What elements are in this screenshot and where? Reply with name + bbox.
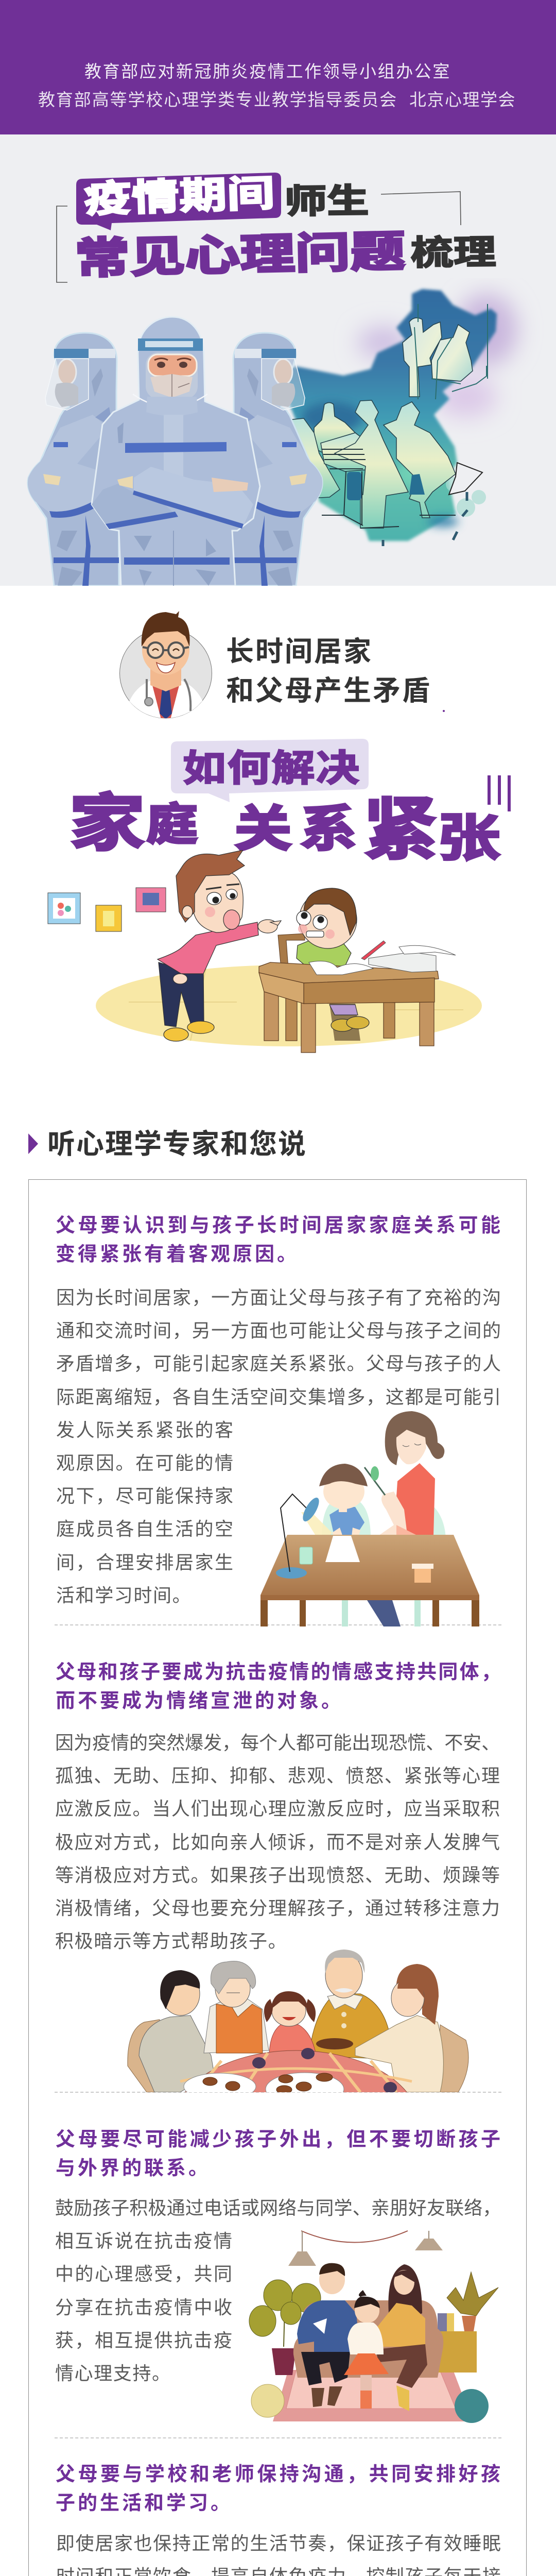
small dot: [443, 710, 445, 712]
advice 1 text: 况下，尽可能保持家: [56, 1485, 233, 1506]
bubble text: 如何解决: [183, 748, 359, 789]
man: [297, 2263, 360, 2407]
title words sorting: 梳理: [410, 233, 496, 272]
word family: 家: [69, 788, 145, 858]
advice 1 text: 通和交流时间，另一方面也可能让父母与孩子之间的: [56, 1320, 501, 1341]
advice 4 text: 即使居家也保持正常的生活节奏，保证孩子有效睡眠: [56, 2533, 501, 2554]
dark gaps: [347, 472, 425, 500]
advice 1 text: 庭成员各自生活的空: [56, 1518, 233, 1539]
left man: [139, 1970, 214, 2092]
topic heading line 2: 和父母产生矛盾: [226, 675, 431, 706]
child: [319, 1464, 368, 1548]
mother: [158, 850, 281, 1041]
advice 1 heading: [56, 1215, 500, 1265]
woman: [376, 2264, 427, 2411]
issuer line 1: 教育部应对新冠肺炎疫情工作领导小组办公室: [84, 62, 451, 81]
spatter islands: [446, 477, 486, 517]
advice 2 text: [55, 1732, 500, 1952]
advice 3 text: 分享在抗击疫情中收: [55, 2297, 232, 2318]
word family: [69, 788, 500, 868]
advice 2 heading: 父母和孩子要成为抗击疫情的情感支持共同体，: [56, 1662, 500, 1683]
left plant: [249, 2280, 321, 2347]
grandfather: [309, 1950, 392, 2059]
picture frames: [48, 888, 166, 931]
advice 1 text: 因为长时间居家，一方面让父母与孩子有了充裕的沟: [56, 1287, 501, 1308]
chair: [278, 934, 305, 969]
child: [297, 888, 369, 1031]
table: [185, 2050, 407, 2092]
cabinet and books: [435, 2331, 477, 2372]
illustration: mother scolding child: [47, 850, 482, 1053]
title bracket left: [57, 206, 67, 282]
panel: expert advice: [28, 1179, 527, 2576]
advice 3 text: 中的心理感受，共同: [55, 2263, 232, 2284]
sketched medics in the north: [403, 318, 473, 397]
advice 2 text: 消极情绪，父母也要充分理解孩子，通过转移注意力: [55, 1897, 500, 1919]
advice 3 text: 相互诉说在抗击疫情: [55, 2230, 232, 2251]
advice 2 text: 极应对方式，比如向亲人倾诉，而不是对亲人发脾气: [55, 1832, 500, 1853]
topic title: [69, 739, 511, 863]
rug: [273, 2370, 473, 2421]
divider 2: [55, 2092, 501, 2093]
issuer line 2: 教育部高等学校心理学类专业教学指导委员会: [38, 90, 397, 109]
lavender bubble: [171, 739, 369, 802]
paper: [325, 1536, 360, 1562]
floor: [96, 965, 482, 1046]
grandmother: [204, 1961, 269, 2053]
scattered strokes: [383, 492, 467, 546]
mother: [316, 1964, 443, 2092]
book and stack: [309, 941, 456, 975]
header band: [0, 0, 556, 134]
mother: [360, 1411, 444, 1555]
white south corner: [449, 463, 482, 495]
advice 3 heading: [56, 2129, 500, 2179]
lamp light: [301, 1512, 332, 1546]
cup: [300, 1547, 312, 1564]
advice 2 text: 孤独、无助、压抑、抑郁、悲观、愤怒、紧张等心理: [55, 1765, 500, 1786]
section heading: [28, 1129, 307, 1160]
title words in bubble: 疫情期间: [83, 173, 275, 221]
advice 2 heading: [56, 1662, 500, 1712]
watercolor map: [288, 289, 517, 546]
advice 1 text: 矛盾增多，可能引起家庭关系紧张。父母与孩子的人: [56, 1353, 501, 1374]
advice 3 text: 鼓励孩子积极通过电话或网络与同学、亲朋好友联络，: [55, 2197, 501, 2218]
title bubble: [76, 173, 281, 230]
mooncakes: [203, 2073, 333, 2094]
doctor avatar: [119, 611, 212, 718]
sketched medics around stretcher: [288, 400, 456, 528]
medic right: [231, 333, 322, 586]
girl: [264, 1991, 316, 2053]
word courtyard: 庭: [146, 800, 198, 849]
hero illustration: [27, 284, 527, 586]
hero panel: [0, 134, 556, 586]
triangle marker: [28, 1133, 38, 1154]
topic heading line 1: 长时间居家: [226, 636, 373, 667]
advice 2 text: 积极暗示等方式帮助孩子。: [55, 1930, 287, 1952]
advice 4 text: [56, 2533, 501, 2576]
advice 1 text: [56, 1287, 501, 1606]
table: [260, 1535, 479, 1595]
stretcher rails: [322, 449, 456, 528]
divider 3: [55, 2437, 501, 2438]
advice 2 text: 等消极应对方式。如果孩子出现愤怒、无助、烦躁等: [55, 1865, 500, 1886]
medic left: [28, 333, 119, 586]
chairs: [322, 1497, 371, 1538]
title words common psychological problems: 常见心理问题: [74, 228, 406, 283]
advice 1 text: 发人际关系紧张的客: [56, 1419, 233, 1440]
jeans: [367, 1600, 401, 1626]
advice 1 text: 间，合理安排居家生: [56, 1552, 233, 1573]
chairs: [127, 2019, 160, 2092]
advice 4 heading: [56, 2464, 500, 2514]
divider 1: [55, 1624, 501, 1625]
advice 3 text: 获，相互提供抗击疫: [55, 2330, 232, 2351]
illustration: family at table: [127, 1950, 468, 2092]
title bracket right: [381, 192, 461, 225]
plates: [183, 2073, 256, 2092]
hanging lamps: [288, 2231, 443, 2266]
advice 3 heading: 父母要尽可能减少孩子外出，但不要切断孩子: [56, 2129, 500, 2150]
lamp: [276, 1567, 307, 1579]
advice 1 text: 观原因。在可能的情: [56, 1452, 233, 1473]
advice 4 heading: 父母要与学校和老师保持沟通，共同安排好孩: [56, 2464, 500, 2485]
medic center: [92, 317, 260, 586]
tea cups: [252, 2048, 397, 2093]
advice 3 heading: 与外界的联系。: [56, 2158, 211, 2179]
advice 1 text: 活和学习时间。: [56, 1585, 192, 1606]
advice 2 heading: 而不要成为情绪宣泄的对象。: [56, 1690, 343, 1712]
tension lines: [489, 775, 509, 811]
word guan: 关: [234, 802, 292, 857]
word xi: 系: [300, 802, 357, 857]
advice 3 text: 情心理支持。: [55, 2363, 171, 2384]
advice 2 text: 应激反应。当人们出现心理应激反应时，应当采取积: [55, 1798, 500, 1819]
right plant: [447, 2272, 498, 2316]
hero title: [56, 173, 496, 283]
pillows: [251, 2384, 284, 2417]
section heading text: 听心理学专家和您说: [47, 1129, 307, 1160]
sofa: [293, 2300, 443, 2378]
illustration: family on sofa: [249, 2230, 498, 2423]
advice 1 text: 际距离缩短，各自生活空间交集增多，这都是可能引: [56, 1386, 501, 1408]
title words teachers and students: 师生: [284, 182, 369, 221]
girl: [344, 2290, 389, 2409]
advice 2 text: 因为疫情的突然爆发，每个人都可能出现恐慌、不安、: [55, 1732, 500, 1753]
advice 4 heading: 子的生活和学习。: [56, 2493, 233, 2514]
advice 3 text: [55, 2197, 501, 2384]
illustration: mother helping child study: [260, 1411, 479, 1626]
tablet leaf: [364, 1467, 385, 1495]
box: [412, 1564, 433, 1569]
advice 1 heading: 变得紧张有着客观原因。: [56, 1244, 299, 1265]
issuer line 2: 北京心理学会: [409, 90, 516, 109]
desk: [259, 962, 439, 1053]
advice 1 heading: 父母要认识到与孩子长时间居家家庭关系可能: [56, 1215, 500, 1236]
